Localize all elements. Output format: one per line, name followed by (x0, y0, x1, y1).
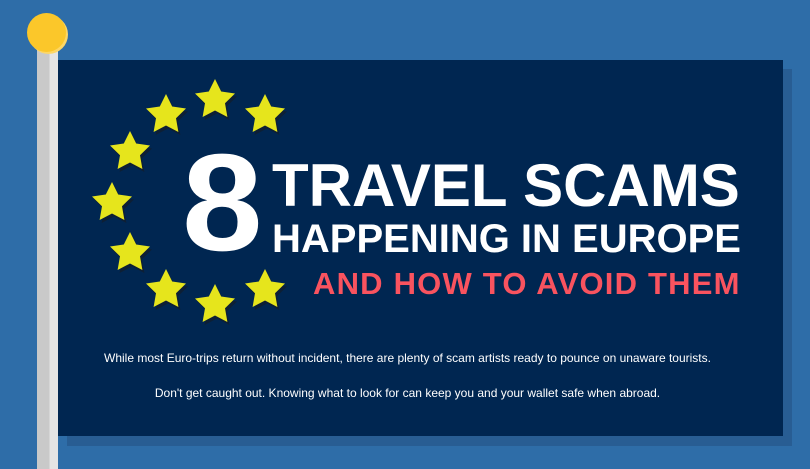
text block: intro: While most Euro-trips return without incident, there are plenty of scam artists ready to pounce on unaware tourists. (104, 351, 711, 365)
stars circle (92, 79, 287, 325)
subtitle: AND HOW TO AVOID THEM (313, 266, 741, 301)
title: TRAVEL SCAMS (272, 152, 740, 219)
text block: intro (104, 351, 711, 400)
title (272, 152, 741, 261)
title: HAPPENING IN EUROPE (272, 217, 741, 261)
panel: flag (58, 60, 783, 436)
text block: intro: Don't get caught out. Knowing what to look for can keep you and your wallet safe when abroad. (155, 386, 660, 400)
title: number 8: 8 (182, 126, 263, 280)
flagpole ball (27, 13, 66, 52)
flag shadow (67, 69, 792, 446)
flagpole (37, 40, 58, 469)
